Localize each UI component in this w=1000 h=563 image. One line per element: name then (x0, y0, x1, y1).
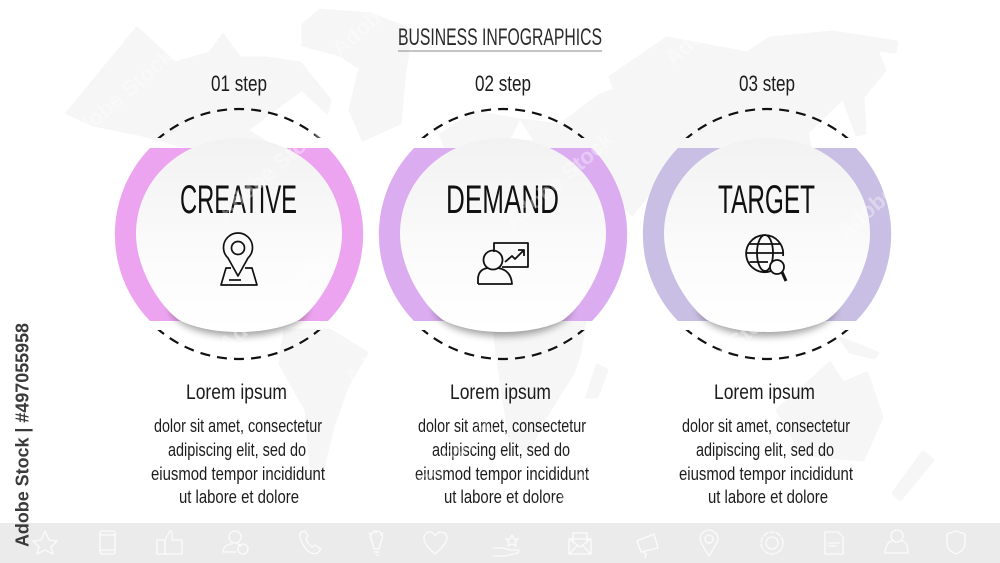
description text 3: dolor sit amet, consectetur (682, 416, 850, 436)
watermark text: Adobe Stock (212, 116, 330, 224)
heading creative: CREATIVE (180, 178, 297, 222)
description heading 3: Lorem ipsum (714, 381, 815, 404)
watermark text: Adobe Stock (832, 136, 950, 244)
strip icons (33, 530, 965, 558)
step label 2: 02 step (475, 71, 531, 96)
description text 2 (415, 416, 589, 507)
vertical stock id text: Adobe Stock | #497055958 (12, 323, 32, 547)
description text 3: ut labore et dolore (708, 487, 828, 507)
panel: step 3 target (642, 71, 892, 507)
step label 3: 03 step (739, 71, 795, 96)
description heading 1: Lorem ipsum (186, 381, 287, 404)
description text 1: ut labore et dolore (179, 487, 299, 507)
description heading 2: Lorem ipsum (450, 381, 551, 404)
description text 3 (679, 416, 853, 507)
bottom icon strip (0, 523, 1000, 563)
watermark text: Adobe Stock (540, 413, 658, 521)
world map background (67, 10, 933, 500)
heading demand: DEMAND (446, 178, 559, 222)
disc 1 (136, 138, 342, 332)
watermark text: Adobe (660, 7, 728, 71)
heading target: TARGET (718, 178, 815, 222)
disc shadow 3 (699, 280, 835, 336)
watermark text: Adobe Stock (667, 296, 785, 404)
description text 2: ut labore et dolore (444, 487, 564, 507)
description text 2: dolor sit amet, consectetur (418, 416, 586, 436)
description text 3: eiusmod tempor incididunt (679, 464, 853, 484)
step label 1: 01 step (211, 71, 267, 96)
watermark text: Adobe Stock (60, 43, 178, 151)
disc shadow 2 (435, 280, 571, 336)
icon: globe with magnifier (746, 235, 786, 281)
description text 1: adipiscing elit, sed do (168, 440, 306, 460)
icon: presenter with chart (478, 243, 528, 284)
watermark text: Adobe Stock (47, 401, 165, 509)
description text 2: adipiscing elit, sed do (432, 440, 570, 460)
dashed circle 3 (685, 108, 849, 360)
title: BUSINESS INFOGRAPHICS (398, 24, 602, 51)
watermark text: Adobe Stock (500, 126, 618, 234)
watermark text: Adobe (340, 327, 408, 391)
disc 2 (400, 138, 606, 332)
watermark text: Adobe (874, 307, 942, 371)
ring 1 (115, 148, 363, 321)
dashed circle 2 (421, 108, 585, 360)
ring 3 (643, 148, 891, 321)
disc 3 (664, 138, 870, 332)
panel: step 2 demand (378, 71, 628, 507)
description text 1: dolor sit amet, consectetur (154, 416, 322, 436)
dashed circle 1 (157, 108, 321, 360)
watermark text: Adobe Stock (380, 413, 498, 521)
ring 2 (379, 148, 627, 321)
map gap (510, 120, 533, 140)
description text 2: eiusmod tempor incididunt (415, 464, 589, 484)
icon: map pin (221, 233, 257, 285)
disc shadow 1 (171, 280, 307, 336)
watermark text: Adobe (890, 457, 958, 521)
watermark text: Adobe Stock (214, 249, 332, 357)
description text 3: adipiscing elit, sed do (696, 440, 834, 460)
description text 1: eiusmod tempor incididunt (151, 464, 325, 484)
description text 1 (151, 416, 325, 507)
panel: step 1 creative (114, 71, 364, 507)
